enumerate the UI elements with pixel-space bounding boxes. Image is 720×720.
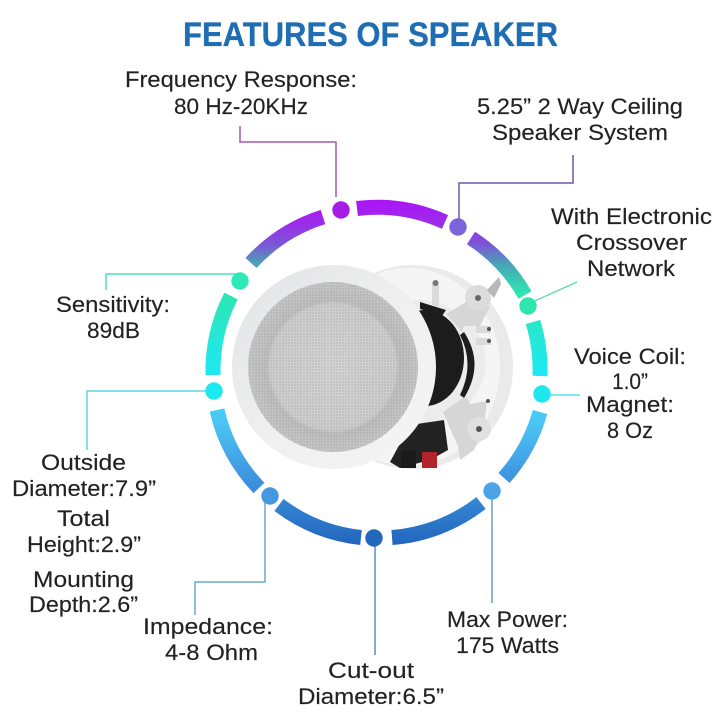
- label: sensitivity: [56, 292, 170, 343]
- label: dimensions: Outside: [41, 450, 126, 475]
- speaker back housing: [313, 265, 513, 469]
- speaker front rim: [232, 265, 436, 469]
- label: ceiling speaker system: [477, 94, 683, 145]
- connector: voice coil: [541, 394, 580, 396]
- speaker mounting clamp bottom: [443, 396, 491, 460]
- label: crossover network: With Electronic: [551, 204, 712, 229]
- speaker product image: [232, 265, 513, 469]
- connector: outside diameter: [87, 391, 210, 450]
- label: cut-out diameter: Diameter:6.5”: [298, 684, 444, 709]
- label: dimensions: Depth:2.6”: [29, 592, 138, 617]
- label: ceiling speaker system: 5.25” 2 Way Ceiling: [477, 94, 683, 119]
- label: max power: [447, 607, 568, 658]
- dot: frequency response: [332, 201, 350, 219]
- speaker grille: [248, 282, 418, 452]
- label: cut-out diameter: Cut-out: [328, 658, 414, 683]
- label: frequency response: Frequency Response:: [125, 67, 357, 92]
- label: dimensions: Mounting: [33, 567, 134, 592]
- label: impedance: [143, 614, 273, 665]
- connector: frequency response: [240, 126, 336, 197]
- label: dimensions: Total: [57, 506, 110, 531]
- label: sensitivity: Sensitivity:: [56, 292, 170, 317]
- label: max power: Max Power:: [447, 607, 568, 632]
- label: voice coil and magnet: Magnet:: [586, 392, 674, 417]
- speaker magnet: [386, 302, 474, 406]
- connector: sensitivity: [106, 274, 236, 290]
- dot: cut-out: [365, 529, 383, 547]
- dot: max power: [483, 482, 501, 500]
- label: crossover network: Network: [587, 256, 676, 281]
- label: cut-out diameter: [298, 658, 444, 709]
- connector: max power: [491, 495, 493, 603]
- label: frequency response: [125, 67, 357, 119]
- label: dimensions: Height:2.9”: [27, 532, 141, 557]
- label: impedance: 4-8 Ohm: [165, 640, 258, 665]
- label: frequency response: 80 Hz-20KHz: [174, 94, 308, 119]
- label: crossover network: Crossover: [576, 230, 687, 255]
- dot: outside diameter: [205, 382, 223, 400]
- label: voice coil and magnet: 8 Oz: [607, 418, 653, 443]
- label: voice coil and magnet: Voice Coil:: [574, 344, 686, 369]
- dot: voice coil: [533, 385, 551, 403]
- dot: crossover network: [519, 297, 537, 315]
- connector: cut-out: [374, 540, 376, 655]
- label: dimensions: [12, 450, 156, 617]
- label: max power: 175 Watts: [456, 633, 559, 658]
- label: voice coil and magnet: [574, 344, 686, 443]
- dot: ceiling speaker system: [449, 218, 467, 236]
- dot: sensitivity: [231, 272, 249, 290]
- title: FEATURES OF SPEAKER: [183, 16, 558, 54]
- label: ceiling speaker system: Speaker System: [492, 120, 668, 145]
- circular ring segments: [213, 207, 540, 537]
- label: crossover network: [551, 204, 712, 281]
- connector: impedance: [195, 498, 265, 615]
- connector: crossover network: [530, 282, 577, 303]
- label: dimensions: Diameter:7.9”: [12, 476, 156, 501]
- dot: impedance: [261, 487, 279, 505]
- label: voice coil and magnet: 1.0”: [612, 369, 648, 394]
- connector: ceiling speaker system: [459, 155, 573, 220]
- speaker mounting clamp top: [432, 277, 501, 345]
- speaker terminal block: [390, 420, 448, 468]
- label: impedance: Impedance:: [143, 614, 273, 639]
- label: sensitivity: 89dB: [87, 318, 140, 343]
